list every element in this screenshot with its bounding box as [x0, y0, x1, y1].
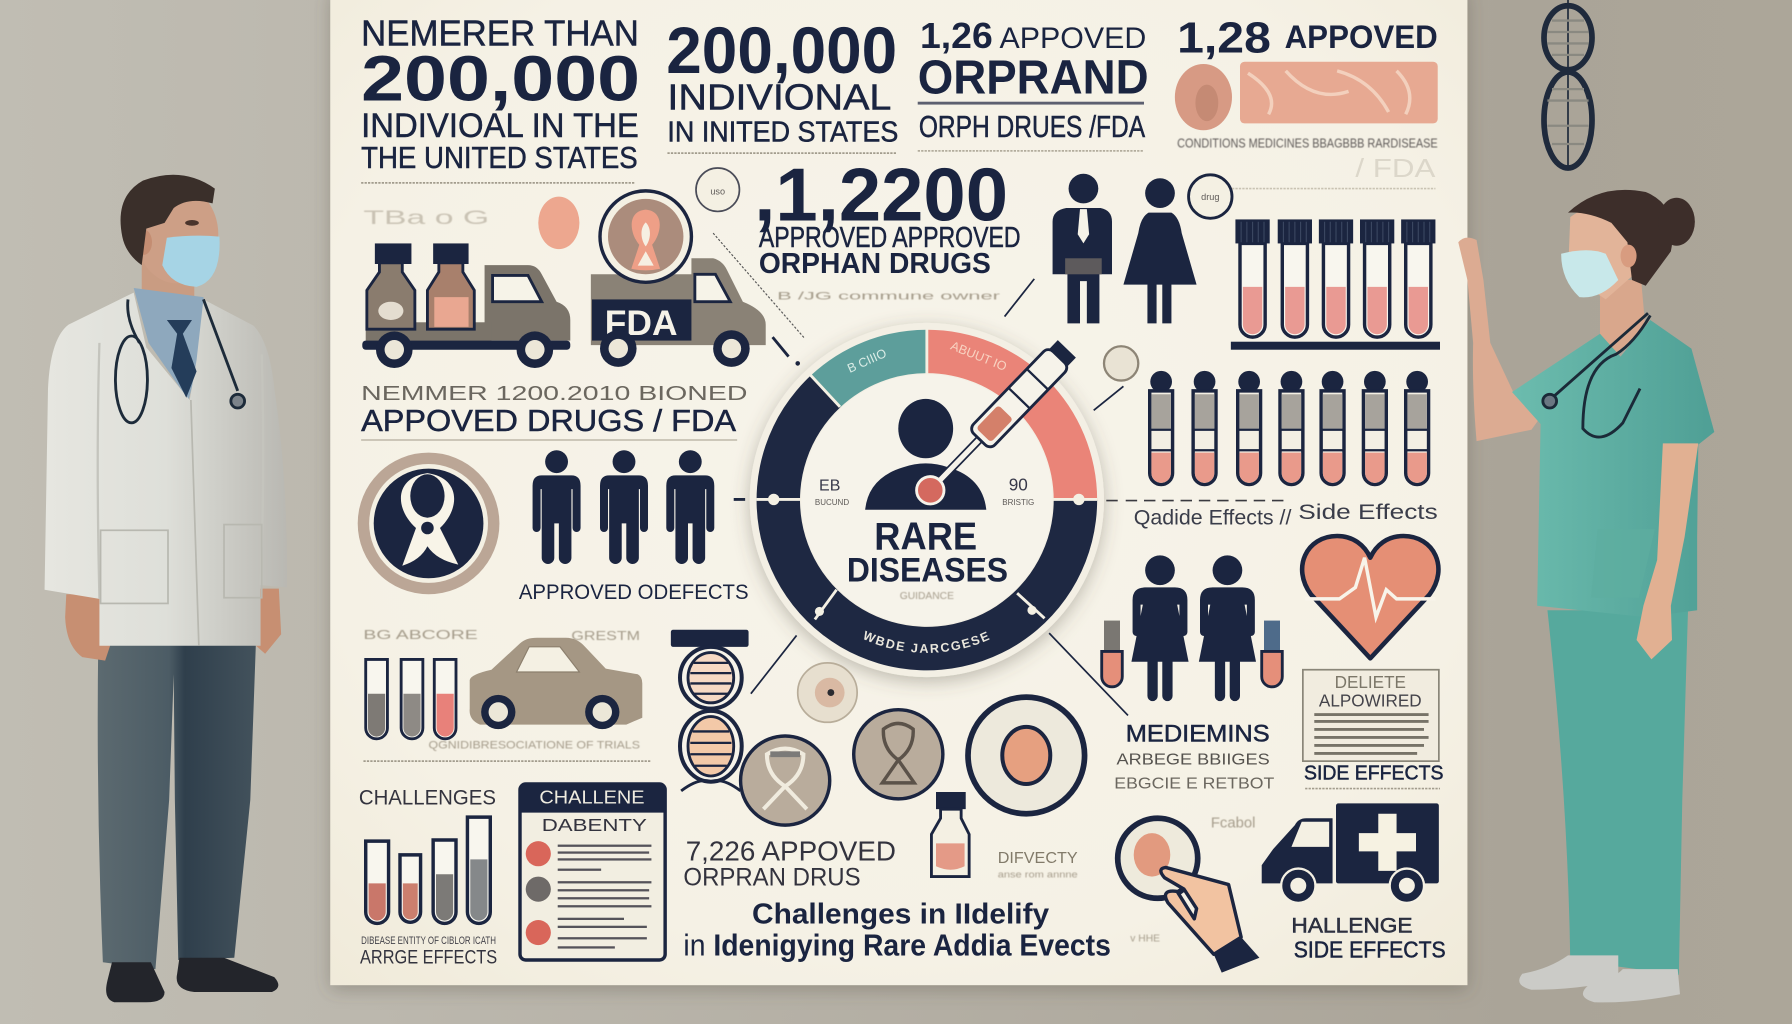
face	[1568, 206, 1634, 299]
couple icon top	[1053, 174, 1197, 323]
panel: second statistic	[666, 14, 898, 149]
neck	[1600, 280, 1646, 366]
tube three	[434, 659, 456, 739]
orphan heading: ORPRAND	[918, 52, 1149, 105]
line two: SIDE EFFECTS	[1294, 937, 1446, 963]
tube right	[1262, 621, 1282, 687]
small badge	[1189, 175, 1232, 218]
central dial	[740, 318, 1114, 691]
FDA label	[592, 299, 691, 343]
side effects label: SIDE EFFECTS	[1304, 761, 1443, 784]
icon: heart with pulse	[1302, 536, 1438, 658]
label individuals: INDIVIONAL	[667, 77, 891, 118]
small line: DIBEASE ENTITY OF CIBLOR ICATH	[361, 935, 496, 947]
approved caption bottom	[683, 836, 896, 892]
trousers	[1547, 610, 1688, 975]
icon: car	[470, 638, 642, 729]
panel: challenge card	[520, 784, 665, 960]
shoes	[106, 958, 278, 1002]
figure: doctor	[45, 175, 287, 1002]
heading line two: in Idenigying Rare Addia Evects	[683, 927, 1111, 962]
panel: fourth statistic	[1175, 15, 1438, 183]
bottle one	[367, 243, 415, 329]
card subheading: DABENTY	[542, 815, 648, 835]
hair	[1568, 190, 1673, 286]
eye	[185, 220, 199, 226]
test tube row	[1231, 219, 1440, 350]
panel: third statistic	[918, 15, 1149, 144]
icon: salmon cell	[1175, 64, 1232, 130]
label orphan drugs: ORPH DRUES /FDA	[919, 109, 1145, 144]
challenge side effects label	[1291, 913, 1446, 963]
pointer to dial	[751, 635, 797, 694]
title rare: RARE	[874, 516, 977, 559]
arrow to central dial	[773, 337, 800, 366]
number four: 1,28	[1177, 15, 1271, 63]
side stat left: BUCUND	[815, 498, 849, 507]
line two: ORPRAN DRUS	[683, 864, 861, 892]
medicines caption	[1114, 721, 1275, 793]
ear	[136, 230, 152, 255]
approved label centre: APPROVED APPROVED	[759, 222, 1021, 254]
bar tubes left	[366, 817, 490, 923]
side stat left: EB	[819, 477, 840, 494]
bottle two	[427, 243, 474, 329]
wheels	[376, 331, 553, 368]
balloon callout: uso	[710, 186, 725, 196]
icon: small bottle	[931, 792, 969, 877]
salmon label: ABUUT IO	[949, 339, 1009, 374]
number and label: 1,26 APPOVED	[920, 15, 1146, 56]
side stat right	[1002, 474, 1034, 507]
icon: salmon cell small	[538, 197, 579, 249]
side stat right: BRISTIG	[1002, 498, 1034, 507]
hands	[65, 589, 281, 661]
doc lines	[1314, 713, 1429, 755]
small badge: drug	[1201, 192, 1219, 202]
side effects caption	[1134, 499, 1438, 530]
tube left	[1102, 621, 1122, 687]
tube two	[401, 659, 423, 739]
wheels	[1281, 869, 1424, 903]
side stat right: 90	[1009, 474, 1028, 494]
bullet icons	[526, 841, 551, 945]
sub line two: THE UNITED STATES	[361, 140, 638, 175]
faded small caption over car: GRESTM	[571, 629, 640, 643]
vial row	[1150, 371, 1429, 485]
tube one	[366, 841, 389, 923]
faded caption near hand: Fcabol	[1211, 815, 1255, 831]
rule	[918, 102, 1144, 105]
salmon tissue band	[1240, 62, 1438, 123]
car wheels	[481, 695, 619, 729]
icon: two women with tubes	[1102, 555, 1282, 701]
icon: hand pressing circle	[1118, 818, 1259, 973]
caption left: Qadide Effects //	[1134, 505, 1292, 530]
tube three	[433, 840, 456, 923]
caption right: Side Effects	[1298, 499, 1438, 524]
mask	[162, 236, 220, 287]
curved label: WBDE JARCGESE	[864, 630, 990, 653]
line one: HALLENGE	[1291, 913, 1413, 938]
poster board	[330, 0, 1467, 985]
hair	[121, 175, 215, 265]
icon: ambulance	[1262, 803, 1439, 903]
man with tie	[1053, 174, 1112, 323]
icon: truck with bottles	[362, 243, 570, 368]
icon: DNA helix	[671, 630, 749, 791]
cross	[1359, 814, 1416, 871]
line one: 7,226 APPOVED	[686, 836, 896, 867]
heading line: NEMERER THAN	[361, 13, 639, 54]
orphan drugs label centre: ORPHAN DRUGS	[759, 248, 991, 280]
neck	[142, 257, 194, 309]
test tubes left	[366, 659, 456, 739]
stethoscope	[1543, 313, 1650, 437]
pocket	[1591, 529, 1655, 598]
helix lobes	[680, 647, 742, 791]
caption: approved drugs FDA	[361, 382, 747, 438]
connector to dial right	[1106, 500, 1290, 502]
big number: 200,000	[361, 43, 640, 115]
figure: DNA hanging icon	[1544, 0, 1592, 168]
pointer line	[1049, 633, 1128, 715]
figure: nurse	[1458, 190, 1714, 1002]
tie	[167, 320, 197, 398]
main line: APPOVED DRUGS / FDA	[361, 403, 736, 438]
faded caption under hand: v HHE	[1130, 934, 1160, 945]
pockets	[101, 400, 262, 646]
person icon	[865, 399, 986, 510]
wheels	[600, 330, 750, 367]
connector to dial left	[734, 498, 745, 501]
shirt	[134, 288, 208, 400]
card header: CHALLENE	[539, 786, 645, 807]
lab coat	[45, 293, 287, 646]
icon: large ribbon emblem	[358, 453, 499, 594]
connector line	[1005, 279, 1034, 317]
title diseases: DISEASES	[847, 552, 1008, 590]
inner disc	[801, 374, 1053, 626]
icon: ribbon circle middle	[854, 710, 943, 799]
balloon callout	[696, 168, 805, 338]
approved document	[1303, 670, 1439, 761]
doc subheading: ALPOWIRED	[1319, 690, 1422, 710]
raised arm	[1458, 238, 1541, 441]
approved label: APPOVED	[1285, 19, 1438, 55]
teal segment	[811, 330, 927, 407]
caption effects	[998, 850, 1078, 880]
faded caption centre: B /JG commune owner	[777, 290, 1000, 302]
FDA label: FDA	[605, 303, 678, 343]
ear	[1621, 245, 1637, 267]
tube one	[366, 659, 387, 739]
line two: EBGCIE E RETBOT	[1114, 776, 1275, 793]
syringe	[910, 339, 1078, 510]
shoes	[1519, 955, 1680, 1002]
trousers	[98, 640, 256, 969]
tube four	[467, 817, 490, 923]
small ear badge	[1094, 346, 1138, 410]
icon: ribbon circle left	[741, 736, 830, 825]
faded captions above the truck: TBa o G	[363, 207, 489, 229]
panel: top-left statistic	[361, 13, 640, 175]
people group	[533, 450, 714, 564]
woman in dress	[1123, 178, 1197, 323]
tube two	[400, 855, 421, 922]
small caption: CONDITIONS MEDICINES BBAGBBB RARDISEASE	[1177, 136, 1438, 150]
faded small caption left: BG ABCORE	[363, 628, 478, 642]
big number centre: ,1,2200	[754, 153, 1008, 237]
main challenge heading	[683, 898, 1111, 962]
caption approved effects: APPROVED ODEFECTS	[519, 579, 749, 604]
heading line: Challenges in IIdelify	[752, 898, 1049, 930]
right arm	[1637, 443, 1698, 659]
mask	[1561, 250, 1618, 297]
side stat left	[815, 477, 849, 507]
faded FDA: / FDA	[1355, 153, 1436, 183]
head	[136, 185, 218, 283]
big number two: 200,000	[666, 14, 897, 88]
card text lines	[558, 845, 651, 949]
teal label: B CIIIO	[845, 346, 889, 376]
hair bun	[1658, 198, 1695, 246]
icon: large circle with cell	[968, 697, 1085, 814]
label: DIFVECTY	[998, 850, 1078, 867]
caption beneath car: QGNIDIBRESOCIATIONE OF TRIALS	[429, 740, 640, 752]
adverse effects caption	[360, 935, 497, 968]
label states: IN INITED STATES	[667, 117, 898, 149]
sleeve folds	[98, 343, 263, 599]
faded line: GUIDANCE	[900, 591, 954, 602]
scrub top	[1512, 320, 1714, 617]
salmon segment	[927, 330, 1097, 500]
small label: anse rom annne	[998, 870, 1078, 880]
dial base	[750, 323, 1104, 677]
main line: ARRGE EFFECTS	[360, 946, 497, 968]
icon: ribbon emblem over truck	[600, 191, 691, 282]
challenges heading left: CHALLENGES	[359, 785, 496, 810]
sub line: INDIVIOAL IN THE	[361, 107, 639, 145]
navy segment	[757, 376, 1097, 670]
icon: FDA truck	[591, 258, 766, 367]
faded line: NEMMER 1200.2010 BIONED	[361, 382, 747, 405]
line one: ARBEGE BBIIGES	[1117, 752, 1270, 769]
doc heading: DELIETE	[1335, 672, 1406, 692]
stethoscope	[115, 299, 245, 423]
heading: MEDIEMINS	[1126, 721, 1270, 748]
card header	[520, 784, 665, 813]
icon: ear circle	[798, 663, 857, 722]
